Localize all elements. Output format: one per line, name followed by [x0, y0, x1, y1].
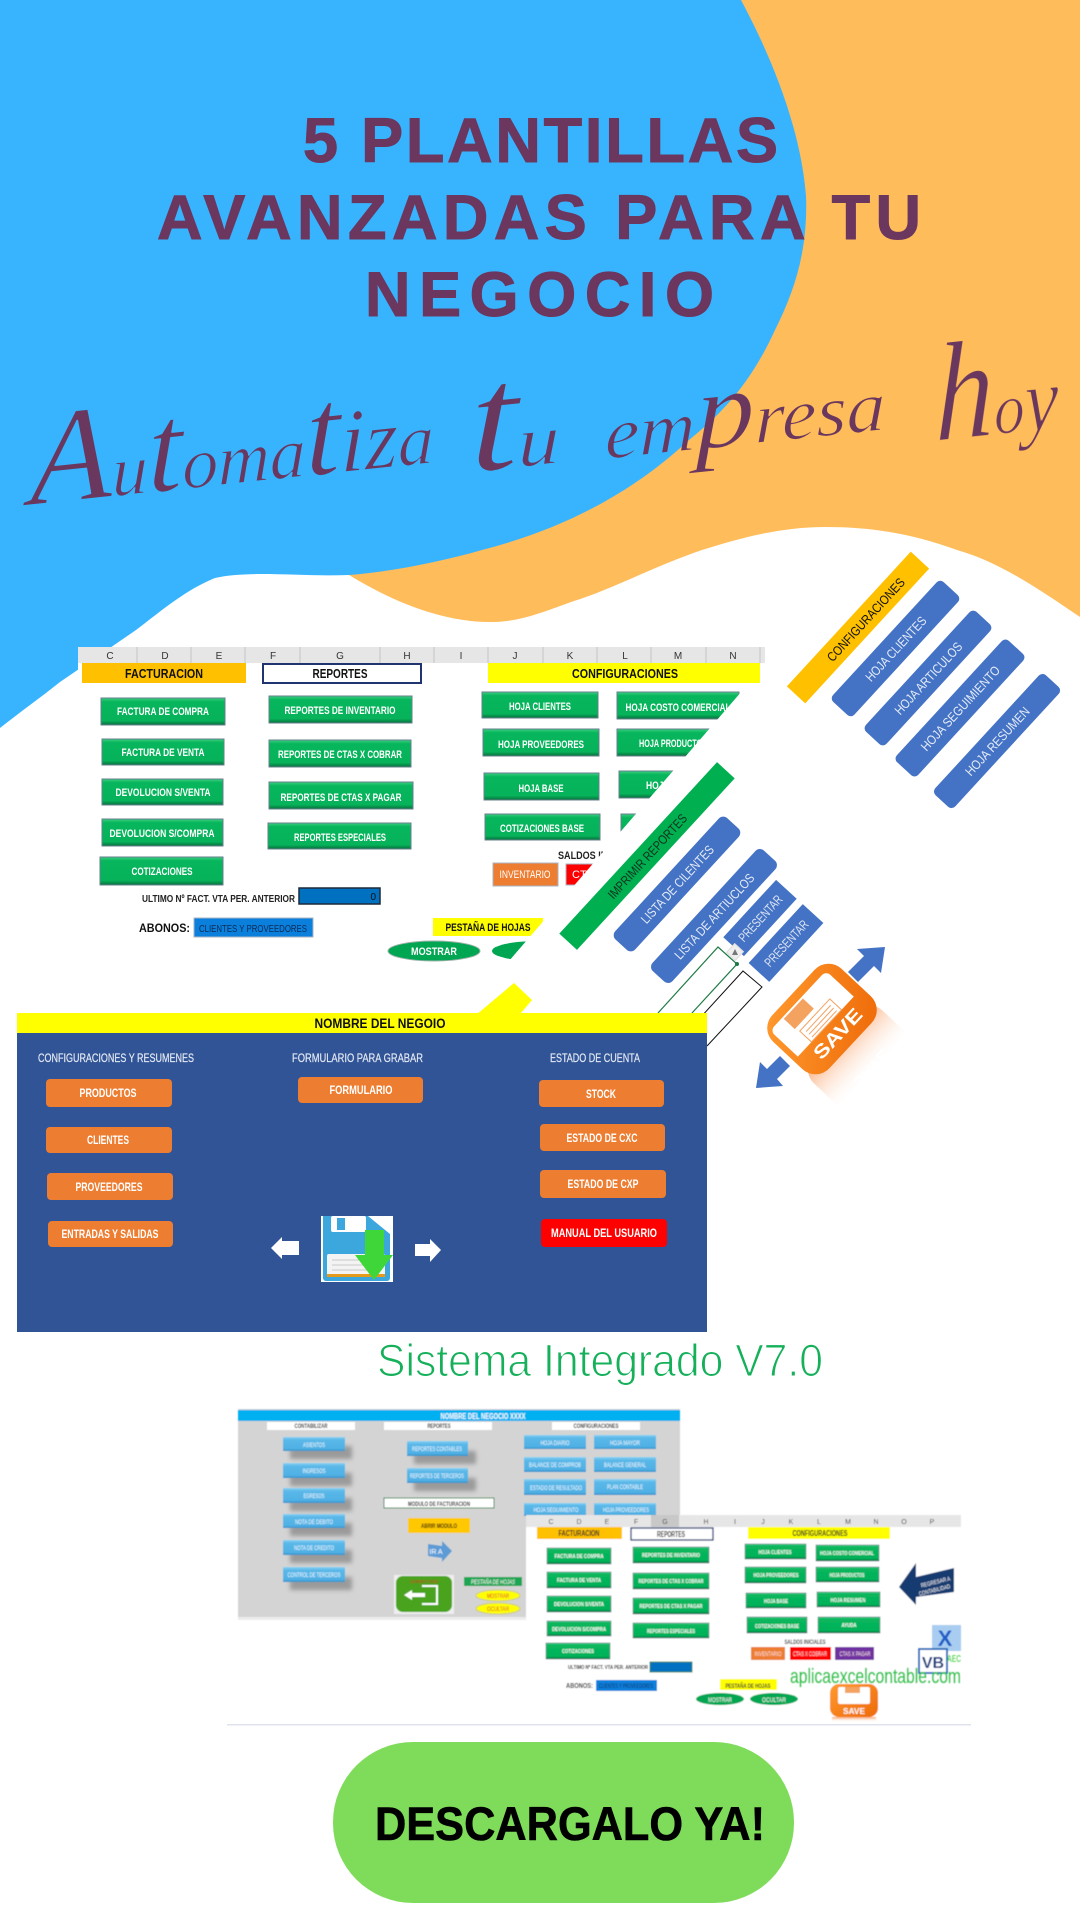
buttons: configuraciones: HOJA COSTO COMERCIAL [820, 1551, 874, 1557]
saldos buttons: CTAS X COBRAR [793, 1652, 827, 1658]
background: blue blob [0, 0, 806, 728]
button: lista de clientes [611, 814, 743, 954]
save reflection: SAVE [849, 1046, 894, 1092]
buttons: reportes: REPORTES DE CTAS X PAGAR [640, 1604, 703, 1610]
script subtitle: empresa [605, 331, 885, 483]
button: clientes y proveedores [194, 918, 313, 937]
rotated yellow header fragment [470, 983, 532, 1020]
button group: configuraciones: HOJA COSTO COMERCIAL [626, 702, 731, 714]
orange buttons: right: ESTADO DE CXP [568, 1179, 639, 1191]
column header row [526, 1515, 961, 1527]
column header row: F [634, 1519, 638, 1526]
heading: facturacion [82, 663, 246, 683]
label: saldos iniciales: SALDOS INICIALES [784, 1640, 826, 1646]
call to action button: DESCARGALO YA! [375, 1797, 765, 1850]
button: hoja clientes: HOJA CLIENTES [862, 613, 930, 684]
script subtitle: tu [470, 328, 560, 505]
icon: vb [919, 1649, 947, 1673]
label: ultimo factura: ULTIMO Nº FACT. VTA PER. ANTERIOR [568, 1665, 648, 1671]
icon: save disk rotated: SAVE [810, 1005, 867, 1064]
orange buttons: right [539, 1080, 667, 1247]
buttons: contabilizar: NOTA DE DEBITO [295, 1519, 333, 1526]
heading: facturacion: FACTURACION [125, 666, 203, 681]
buttons: configuraciones contables: HOJA PROVEEDORES [603, 1507, 649, 1514]
buttons: configuraciones contables: HOJA DIARIO [540, 1440, 570, 1447]
icon: floppy download [321, 1216, 393, 1282]
button group: facturacion [100, 698, 225, 885]
column header row: E [605, 1519, 610, 1526]
button: inventario: INVENTARIO [500, 869, 551, 881]
column header row: I [734, 1519, 736, 1526]
column header row: G [336, 651, 344, 662]
arrow: regresar a contabilidad: REGRESAR A [920, 1576, 951, 1590]
input: ultimo numero [650, 1662, 692, 1672]
button: clientes y proveedores: CLIENTES Y PROVEEDORES [599, 1684, 653, 1690]
buttons: facturacion: DEVOLUCION S/COMPRA [552, 1627, 606, 1633]
sheet: facturacion [526, 1515, 961, 1724]
button: hoja resumen [932, 672, 1062, 810]
column headings: CONFIGURACIONES Y RESUMENES [38, 1053, 194, 1065]
label: pestaña de hojas: PESTAÑA DE HOJAS [471, 1579, 515, 1586]
button: presentar 1 [723, 880, 797, 956]
buttons: configuraciones: HOJA BASE [764, 1599, 788, 1605]
title: AVANZADAS PARA TU [157, 183, 921, 253]
buttons: facturacion: DEVOLUCION S/VENTA [554, 1602, 604, 1608]
button: mostrar: MOSTRAR [708, 1697, 732, 1704]
buttons: contabilizar: INGRESOS [302, 1468, 326, 1475]
buttons: configuraciones: HOJA CLIENTES [758, 1550, 792, 1556]
label: pestaña de hojas [433, 918, 543, 936]
buttons: facturacion: COTIZACIONES [562, 1649, 594, 1655]
button group: configuraciones: HOJA PROVEEDORES [498, 739, 584, 751]
button: presentar 1: PRESENTAR [735, 892, 786, 945]
column header row: D [576, 1519, 582, 1526]
buttons: reportes: REPORTES DE CTAS X COBRAR [638, 1579, 704, 1585]
icon: excel [932, 1625, 961, 1651]
button: mostrar yellow: MOSTRAR [487, 1594, 509, 1600]
button group: facturacion: FACTURA DE COMPRA [117, 706, 209, 718]
button group: configuraciones: HOJA CLIENTES [509, 701, 571, 713]
buttons: configuraciones contables: HOJA SEGUIMIENTO [534, 1507, 578, 1514]
buttons: reportes contables: REPORTES CONTABLES [412, 1446, 462, 1453]
button: mostrar [696, 1693, 744, 1705]
button: clientes y proveedores [596, 1680, 657, 1691]
button: hoja seguimiento: HOJA SEGUIMIENTO [918, 663, 1003, 754]
section labels [267, 1422, 640, 1430]
heading: configuraciones [488, 663, 760, 683]
buttons: reportes contables [407, 1441, 468, 1483]
section labels: REPORTES [428, 1424, 450, 1430]
buttons: configuraciones contables [524, 1435, 656, 1516]
column header row: H [403, 651, 411, 662]
label: pestaña de hojas [464, 1577, 522, 1586]
column header row: I [460, 651, 462, 662]
button: ocultar [492, 941, 584, 961]
column header row: O [901, 1519, 907, 1526]
buttons: facturacion [546, 1548, 611, 1659]
sheet header [238, 1410, 680, 1421]
heading: facturacion [537, 1527, 622, 1539]
icon: save: SAVE [843, 1707, 866, 1716]
buttons: configuraciones: HOJA PROVEEDORES [754, 1573, 799, 1579]
column header row: P [930, 1519, 935, 1526]
column header row: C [106, 651, 114, 662]
save reflection [800, 997, 920, 1119]
column header row [78, 647, 765, 663]
orange buttons: right: MANUAL DEL USUARIO [551, 1228, 657, 1240]
button: guardar y salir: GUARDAR Y SALIR [410, 1579, 439, 1584]
arrow: up right [848, 947, 885, 982]
column header row: G [662, 1519, 668, 1526]
icon: vb: VB [922, 1655, 944, 1672]
bar: imprimir reportes: IMPRIMIR REPORTES [605, 811, 690, 902]
button group: facturacion: FACTURA DE VENTA [122, 747, 205, 759]
button shadows [290, 1446, 476, 1590]
button group: configuraciones: HOJA BASE [518, 783, 564, 795]
input: ultimo numero [299, 888, 380, 904]
column header row: K [567, 651, 574, 662]
buttons: configuraciones: HOJA RESUMEN [830, 1598, 866, 1604]
label: abonos: ABONOS: [139, 921, 190, 935]
column header row: H [703, 1519, 709, 1526]
buttons: contabilizar: NOTA DE CREDITO [294, 1545, 334, 1552]
buttons: reportes contables: REPORTES DE TERCEROS [410, 1473, 464, 1480]
buttons: contabilizar: EGRESOS [304, 1493, 325, 1500]
panel header: NOMBRE DEL NEGOIO [314, 1015, 446, 1031]
arrow: white right [415, 1239, 441, 1262]
button: hoja resumen: HOJA RESUMEN [962, 704, 1033, 779]
button: ocultar: OCULTAR [762, 1697, 786, 1704]
column header row: C [548, 1519, 554, 1526]
sheet: contabilidad [238, 1409, 680, 1620]
background: orange wave [300, 0, 1080, 622]
button: ocultar [750, 1693, 798, 1705]
heading: reportes: REPORTES [312, 666, 368, 681]
orange buttons: right: STOCK [586, 1089, 617, 1101]
heading: reportes [263, 664, 421, 683]
icon: save [830, 1684, 878, 1723]
column headings: FORMULARIO PARA GRABAR [292, 1053, 423, 1065]
label: modulo de facturacion: MODULO DE FACTURACION [408, 1501, 470, 1508]
section labels: CONTABILIZAR [294, 1424, 328, 1430]
button: mostrar: MOSTRAR [411, 946, 457, 958]
button: ctas x cobrar [566, 864, 636, 885]
bar: configuraciones [787, 552, 929, 703]
button group: configuraciones: HOJA PRODUCTOS [639, 738, 707, 750]
button: mostrar [388, 941, 480, 961]
arrow: down left [756, 1056, 790, 1088]
button: guardar y salir [394, 1575, 454, 1614]
rotated menu: reportes [559, 762, 823, 985]
buttons: facturacion: FACTURA DE COMPRA [554, 1554, 604, 1560]
button: abrir modulo [408, 1518, 470, 1533]
panel: nombre del negocio [17, 1013, 707, 1332]
section labels: CONFIGURACIONES [574, 1424, 618, 1430]
call to action button [333, 1742, 794, 1903]
button: hoja clientes [830, 579, 961, 718]
button: abrir modulo: ABRIR MODULO [421, 1523, 457, 1530]
buttons: configuraciones contables: HOJA MAYOR [610, 1440, 640, 1447]
script subtitle [22, 304, 1059, 536]
button group: configuraciones: HOJA RESUMEN [646, 780, 714, 792]
buttons: contabilizar: CONTROL DE TERCEROS [288, 1572, 341, 1579]
column header row: K [789, 1519, 794, 1526]
panel header [17, 1013, 707, 1033]
script subtitle: Automatiza [22, 342, 434, 536]
button: clientes y proveedores: CLIENTES Y PROVEEDORES [199, 923, 307, 935]
saldos buttons: INVENTARIO [754, 1652, 782, 1658]
bar: configuraciones: CONFIGURACIONES [824, 575, 908, 665]
button: lista de clientes: LISTA DE CILENTES [638, 842, 717, 927]
button: inventario [493, 863, 558, 886]
heading: configuraciones [748, 1527, 890, 1539]
buttons: facturacion: FACTURA DE VENTA [557, 1578, 601, 1584]
button group: facturacion: COTIZACIONES [132, 866, 192, 878]
orange buttons: left: CLIENTES [87, 1135, 129, 1147]
orange button: formulario [298, 1077, 423, 1103]
column header row: M [674, 651, 682, 662]
heading: sistema integrado: Sistema Integrado V7.0 [377, 1335, 823, 1386]
orange button: formulario: FORMULARIO [330, 1085, 393, 1097]
buttons: configuraciones: AYUDA [842, 1623, 857, 1629]
heading: reportes: REPORTES [657, 1530, 685, 1539]
button group: facturacion: DEVOLUCION S/VENTA [116, 787, 211, 799]
column header row: J [512, 651, 518, 662]
button group: reportes: REPORTES DE CTAS X PAGAR [280, 792, 402, 804]
button group: reportes: REPORTES DE CTAS X COBRAR [278, 749, 402, 761]
button: ocultar yellow: OCULTAR [487, 1607, 510, 1613]
column header row: F [270, 651, 276, 662]
label: pestaña de hojas: PESTAÑA DE HOJAS [726, 1683, 770, 1690]
bar: imprimir reportes [559, 762, 735, 950]
label: aec: AEC [947, 1654, 961, 1665]
button: hoja articulos: HOJA ARTICULOS [891, 639, 966, 718]
button group: facturacion: DEVOLUCION S/COMPRA [110, 828, 215, 840]
button: ocultar yellow [476, 1603, 520, 1614]
white diagonal mask over sheet [458, 684, 900, 1020]
title [157, 106, 921, 330]
button group: reportes [268, 696, 413, 849]
collage bottom rule [227, 1724, 971, 1726]
saldos buttons [751, 1647, 874, 1660]
label: pestaña de hojas [720, 1679, 777, 1690]
selected outline boxes [658, 944, 762, 1046]
buttons: contabilizar: ASIENTOS [303, 1442, 325, 1449]
column header row: N [873, 1519, 879, 1526]
title: NEGOCIO [365, 260, 714, 330]
button: lista de articulos [649, 847, 779, 985]
label: ultimo factura: ULTIMO Nº FACT. VTA PER. ANTERIOR [142, 894, 296, 905]
button: presentar 2: PRESENTAR [761, 917, 812, 970]
label: website: aplicaexcelcontable.com [790, 1666, 961, 1688]
label: pestaña de hojas: PESTAÑA DE HOJAS [446, 921, 530, 934]
orange buttons: left [46, 1079, 173, 1247]
orange buttons: left: PROVEEDORES [76, 1182, 143, 1194]
label: saldos iniciales: SALDOS INICIALES [558, 850, 643, 862]
column header row: M [845, 1519, 851, 1526]
button: ctas x cobrar: CTAS [572, 869, 601, 881]
input: ultimo numero: 0 [370, 892, 376, 903]
button group: configuraciones [482, 692, 743, 841]
heading: configuraciones: CONFIGURACIONES [792, 1529, 848, 1538]
column header row: L [817, 1519, 821, 1526]
buttons: configuraciones contables: PLAN CONTABLE [607, 1484, 643, 1491]
column header row: L [622, 651, 628, 662]
label: modulo de facturacion [384, 1498, 494, 1508]
column header row: D [161, 651, 169, 662]
column headings: ESTADO DE CUENTA [550, 1053, 640, 1065]
title: 5 PLANTILLAS [303, 106, 778, 176]
buttons: configuraciones [745, 1544, 880, 1633]
button: lista de articulos: LISTA DE ARTIUCLOS [671, 870, 758, 962]
sheet header: NOMBRE DEL NEGOCIO XXXX [440, 1412, 526, 1421]
rotated menu: configuraciones [787, 552, 1062, 810]
buttons: configuraciones contables: BALANCE DE COMPROB [529, 1462, 581, 1469]
buttons: configuraciones contables: BALANCE GENERAL [604, 1462, 646, 1469]
button: mostrar yellow [476, 1590, 520, 1601]
script subtitle: hoy [935, 304, 1059, 472]
label: abonos: ABONOS: [566, 1683, 593, 1690]
buttons: reportes: REPORTES DE INVENTARIO [642, 1553, 701, 1559]
buttons: contabilizar [283, 1437, 345, 1582]
arrow: regresar a contabilidad: CONTABILIDAD [919, 1584, 951, 1598]
heading: facturacion: FACTURACION [558, 1529, 600, 1538]
button group: configuraciones: COTIZACIONES BASE [500, 823, 584, 835]
orange buttons: right: ESTADO DE CXC [566, 1133, 638, 1145]
icon: excel: X [938, 1626, 953, 1651]
column header row: N [729, 651, 737, 662]
column headings [38, 1053, 640, 1065]
icon: save disk rotated [759, 956, 920, 1119]
button: hoja seguimiento [893, 637, 1027, 779]
arrow: ir a [428, 1541, 452, 1562]
orange buttons: left: PRODUCTOS [80, 1088, 137, 1100]
heading: reportes [631, 1528, 713, 1540]
button: presentar 2 [749, 904, 823, 982]
heading: configuraciones: CONFIGURACIONES [572, 666, 678, 681]
buttons: configuraciones contables: ESTADO DE RESULTADO [530, 1485, 582, 1492]
arrow: regresar a contabilidad [899, 1563, 954, 1605]
arrow: ir a: IR A [429, 1549, 443, 1556]
column header row: E [216, 651, 223, 662]
arrow: white left [271, 1237, 299, 1259]
column header row: J [761, 1519, 765, 1526]
buttons: configuraciones: COTIZACIONES BASE [755, 1624, 799, 1630]
buttons: configuraciones: HOJA PRODUCTOS [830, 1573, 865, 1579]
buttons: reportes: REPORTES ESPECIALES [647, 1629, 695, 1635]
buttons: reportes [633, 1547, 709, 1638]
button group: reportes: REPORTES ESPECIALES [294, 832, 386, 844]
panel: screenshots collage [238, 1409, 961, 1724]
panel: excel menu sheet [78, 647, 765, 1007]
saldos buttons: CTAS X PAGAR [840, 1652, 871, 1658]
button group: reportes: REPORTES DE INVENTARIO [284, 705, 396, 717]
orange buttons: left: ENTRADAS Y SALIDAS [62, 1229, 159, 1241]
button: hoja articulos [863, 609, 993, 747]
